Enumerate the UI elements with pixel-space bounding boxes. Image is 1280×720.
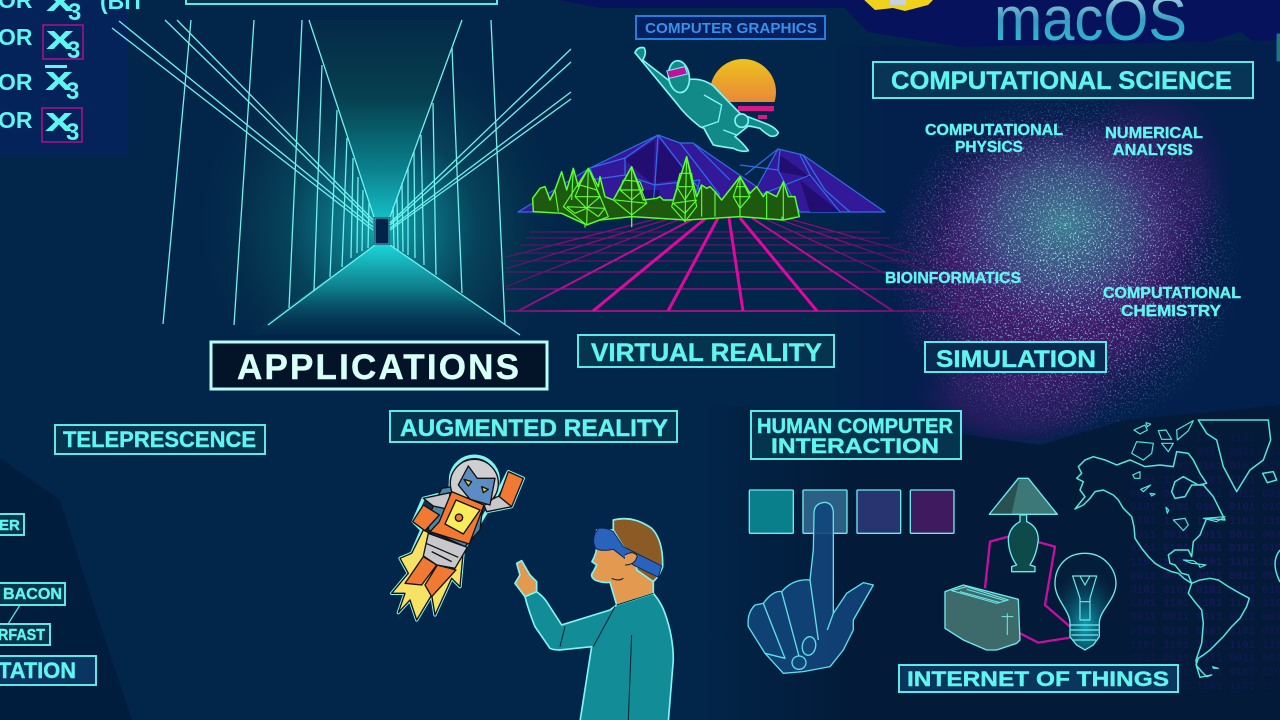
box: highlighted x3 lower xyxy=(42,108,82,142)
illustration: retro sun xyxy=(711,59,776,102)
binary data texture: 0011 0011 0011 0011 001 xyxy=(1130,530,1280,542)
chest dial xyxy=(455,514,463,521)
backpack xyxy=(428,487,483,547)
arctic islands xyxy=(1132,421,1193,513)
heading: computational science xyxy=(873,62,1253,98)
text: x3 complement xyxy=(45,60,79,105)
boots xyxy=(405,557,456,597)
illustration: low poly green forest xyxy=(533,157,799,228)
label: numerical analysis: NUMERICAL xyxy=(1105,125,1203,142)
binary data texture: 0011 0011 0011 0011 001 xyxy=(1130,653,1280,665)
binary data texture: 0101 0101 0101 0101 010 xyxy=(1130,502,1280,514)
binary data texture: 0101 0101 0101 0101 010 xyxy=(1130,626,1280,638)
left glove xyxy=(413,505,439,531)
heading: simulation: SIMULATION xyxy=(936,346,1096,373)
text: x3 complement: 3 xyxy=(66,78,79,105)
text: x3 complement: x xyxy=(45,60,73,98)
arms xyxy=(423,493,512,512)
square teal xyxy=(749,490,793,533)
heading: computer graphics: COMPUTER GRAPHICS xyxy=(645,20,817,37)
binary data texture xyxy=(1130,433,1280,693)
hair xyxy=(613,519,663,583)
VR visor xyxy=(667,67,687,78)
text: x3 xyxy=(46,19,80,64)
south america outline xyxy=(1188,578,1249,677)
label: computational physics xyxy=(925,122,1063,156)
illustration: flying man in VR xyxy=(635,48,778,151)
binary data texture: 1101 1101 1101 1101 110 xyxy=(1130,557,1280,569)
heading: human computer interaction: HUMAN COMPUTER xyxy=(757,415,953,438)
binary data texture: 0101 0101 0101 0101 010 xyxy=(1130,585,1280,597)
binary data texture: 0101 0101 0101 0101 010 xyxy=(1130,543,1280,555)
text: x3: x xyxy=(46,19,74,57)
illustration: data center corridor xyxy=(112,20,575,340)
leg stripes xyxy=(426,543,458,562)
binary data texture: 1101 1101 1101 1101 110 xyxy=(1130,640,1280,652)
heading: human computer interaction: INTERACTION xyxy=(771,435,939,458)
binary data texture: 0011 0011 0011 0011 001 xyxy=(1130,447,1280,459)
edge: green chart sliver xyxy=(1277,34,1280,61)
finger nails xyxy=(801,636,817,656)
heading: computer graphics xyxy=(636,16,825,39)
rocket flames xyxy=(392,530,463,620)
edge: africa arc xyxy=(1275,550,1280,582)
man body xyxy=(635,48,778,151)
binary data texture: 1101 1101 1101 1101 110 xyxy=(1130,516,1280,528)
binary data texture: 0011 0011 0011 0011 001 xyxy=(1130,612,1280,624)
label: bacon box: BACON xyxy=(3,586,62,603)
cat head xyxy=(458,466,495,505)
binary data texture: 1101 1101 1101 1101 110 xyxy=(1130,433,1280,445)
illustration: magenta perspective grid xyxy=(505,218,975,312)
label: bioinformatics: BIOINFORMATICS xyxy=(885,270,1021,287)
cat eyes xyxy=(464,479,488,493)
label: computational physics: COMPUTATIONAL xyxy=(925,122,1063,139)
helmet xyxy=(450,459,498,507)
square indigo xyxy=(857,490,901,533)
label: numerical analysis: ANALYSIS xyxy=(1113,142,1193,159)
label: computational physics: PHYSICS xyxy=(955,139,1023,156)
text: x3 lower: x xyxy=(45,101,73,139)
iceland xyxy=(1263,472,1277,483)
ear xyxy=(625,553,637,565)
binary data texture: 1101 1101 1101 1101 110 xyxy=(1130,598,1280,610)
network wires xyxy=(985,537,1070,643)
background: right science zone xyxy=(820,40,1280,440)
sun stripes xyxy=(738,106,774,119)
text: x3 first line xyxy=(46,0,81,26)
icon: penguin feet xyxy=(862,0,935,11)
cat outer outline xyxy=(392,456,523,620)
binary data texture: 1101 1101 1101 1101 110 xyxy=(1130,681,1280,693)
lamp shade xyxy=(989,478,1057,514)
partial box at top xyxy=(186,0,497,4)
sweater xyxy=(525,592,673,720)
label: numerical analysis xyxy=(1105,125,1203,159)
heading: augmented reality: AUGMENTED REALITY xyxy=(400,415,668,442)
heading: partial presentation box: TATION xyxy=(0,658,76,683)
heading: internet of things: INTERNET OF THINGS xyxy=(907,668,1169,691)
background: lower right dark zone xyxy=(690,400,1280,720)
binary data texture: 0011 0011 0011 0011 001 xyxy=(1130,571,1280,583)
heading: virtual reality: VIRTUAL REALITY xyxy=(591,339,822,367)
right glove xyxy=(499,472,523,507)
binary data texture: 0101 0101 0101 0101 010 xyxy=(1130,667,1280,679)
heading: computational science: COMPUTATIONAL SCIENCE xyxy=(891,67,1232,95)
chest pack xyxy=(430,492,484,544)
illustration: internet of things network xyxy=(945,478,1116,650)
illustration: man with AR headset xyxy=(515,519,673,720)
illustration: wireframe mountains xyxy=(518,135,885,212)
greenland xyxy=(1198,420,1271,492)
label: computational chemistry: COMPUTATIONAL xyxy=(1103,285,1241,302)
lamp shade facet xyxy=(991,479,1019,514)
label: partial er box xyxy=(0,514,24,535)
heading: partial presentation box xyxy=(0,656,96,685)
lamp base xyxy=(1008,515,1038,572)
illustration: touch squares and hand xyxy=(748,490,954,673)
background: top right band xyxy=(560,0,1280,60)
binary data texture: 0101 0101 0101 0101 010 xyxy=(1130,461,1280,473)
toaster slots xyxy=(952,587,1013,635)
hand xyxy=(515,561,537,597)
background: lower-left dark zone xyxy=(0,458,132,720)
heading: telepresence: TELEPRESCENCE xyxy=(63,427,256,452)
chest panel xyxy=(445,500,480,534)
binary data texture: 1101 1101 1101 1101 110 xyxy=(1130,475,1280,487)
illustration: astronaut cat xyxy=(392,456,523,620)
caribbean xyxy=(1183,560,1218,668)
square slate xyxy=(803,490,847,533)
thumb nail xyxy=(792,656,806,669)
man head xyxy=(667,59,691,94)
connector: bacon to breakfast xyxy=(8,605,20,624)
great lakes xyxy=(1173,517,1225,531)
pointing hand xyxy=(748,502,873,673)
toaster xyxy=(945,585,1020,650)
legs striped xyxy=(423,533,467,568)
heading: human computer interaction xyxy=(751,411,961,459)
panel: logic gates list xyxy=(0,0,145,146)
heading: internet of things xyxy=(899,665,1178,692)
sweater folds and smile xyxy=(560,578,653,720)
heading: applications: APPLICATIONS xyxy=(237,348,519,387)
binary data texture: 0011 0011 0011 0011 001 xyxy=(1130,489,1280,501)
label: computational chemistry: CHEMISTRY xyxy=(1121,303,1221,320)
label: bacon box xyxy=(0,583,65,605)
text: x3 lower xyxy=(45,101,79,146)
finger details xyxy=(763,580,833,660)
text: x3: 3 xyxy=(67,37,80,64)
heading: applications xyxy=(211,342,547,389)
filament xyxy=(1070,576,1099,640)
text: x3 lower: 3 xyxy=(66,119,79,146)
icon: penguin belly xyxy=(890,0,906,5)
label: computational chemistry xyxy=(1103,285,1241,320)
man creases xyxy=(702,95,737,135)
background: top-left navy panel xyxy=(0,0,128,155)
headset xyxy=(594,528,662,577)
panel: nebula simulation xyxy=(890,99,1238,442)
square purple xyxy=(910,490,954,533)
illustration: world map americas xyxy=(1075,420,1277,677)
face and neck xyxy=(592,530,653,605)
man hand xyxy=(735,114,748,127)
box: highlighted x3 xyxy=(43,25,83,59)
north america outline xyxy=(1075,452,1225,583)
light bulb xyxy=(1055,553,1116,650)
